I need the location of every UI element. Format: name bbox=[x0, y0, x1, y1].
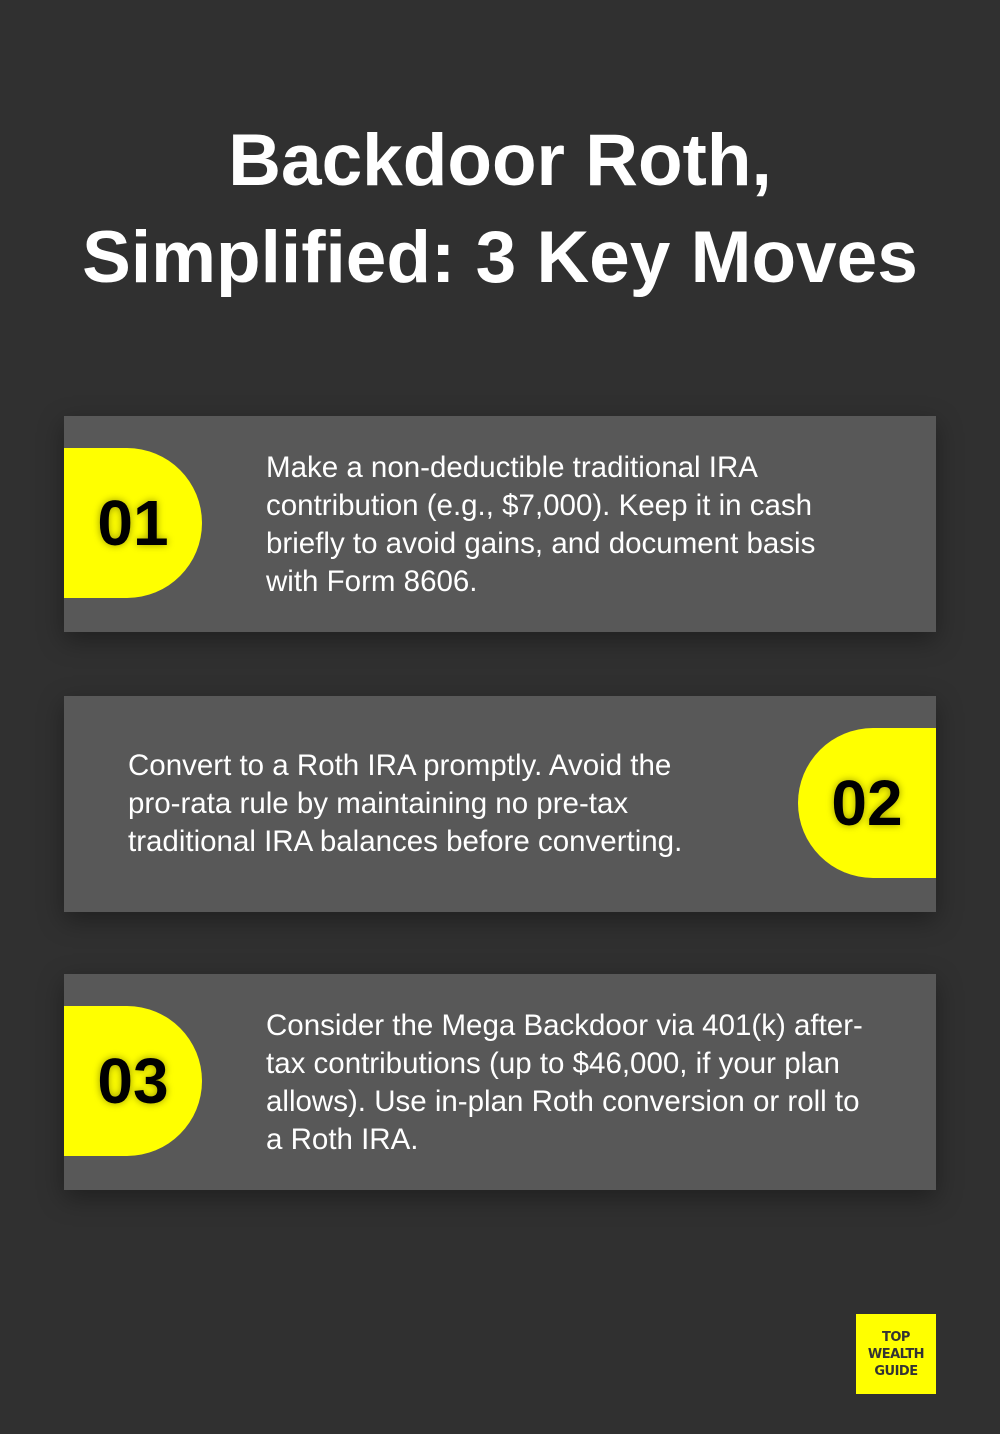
text: step 3: tax contributions (up to $46,000, if your plan bbox=[266, 1047, 840, 1080]
badge: 01 bbox=[64, 448, 202, 598]
text: step 3: a Roth IRA. bbox=[266, 1123, 418, 1156]
text: step 2: pro-rata rule by maintaining no pre-tax bbox=[128, 787, 628, 820]
badge: 03 bbox=[64, 1006, 202, 1156]
logo: WEALTH bbox=[868, 1346, 924, 1362]
text: step 1: with Form 8606. bbox=[266, 565, 478, 598]
text: step 3: Consider the Mega Backdoor via 401(k) after- bbox=[266, 1009, 863, 1042]
logo bbox=[856, 1314, 936, 1394]
title bbox=[82, 120, 918, 298]
logo: GUIDE bbox=[874, 1364, 918, 1378]
title: Simplified: 3 Key Moves bbox=[82, 217, 918, 298]
text: step 3 bbox=[266, 1009, 863, 1156]
text: step 1: contribution (e.g., $7,000). Keep it in cash bbox=[266, 489, 812, 522]
panel: step 2 bbox=[64, 696, 936, 912]
text: step 2: traditional IRA balances before converting. bbox=[128, 825, 682, 858]
text: step 1 bbox=[266, 451, 815, 598]
badge: 02: 02 bbox=[831, 767, 903, 839]
text: step 2 bbox=[128, 749, 682, 858]
text: step 2: Convert to a Roth IRA promptly. Avoid the bbox=[128, 749, 671, 782]
text: step 1: Make a non-deductible traditional IRA bbox=[266, 451, 758, 484]
text: step 1: briefly to avoid gains, and document basis bbox=[266, 527, 815, 560]
panel: step 1 bbox=[64, 416, 936, 632]
badge: 01: 01 bbox=[97, 487, 169, 559]
badge: 02 bbox=[798, 728, 936, 878]
text: step 3: allows). Use in-plan Roth conversion or roll to bbox=[266, 1085, 860, 1118]
logo: TOP bbox=[882, 1330, 910, 1344]
title: Backdoor Roth, bbox=[228, 120, 772, 201]
badge: 03: 03 bbox=[97, 1045, 169, 1117]
panel: step 3 bbox=[64, 974, 936, 1190]
